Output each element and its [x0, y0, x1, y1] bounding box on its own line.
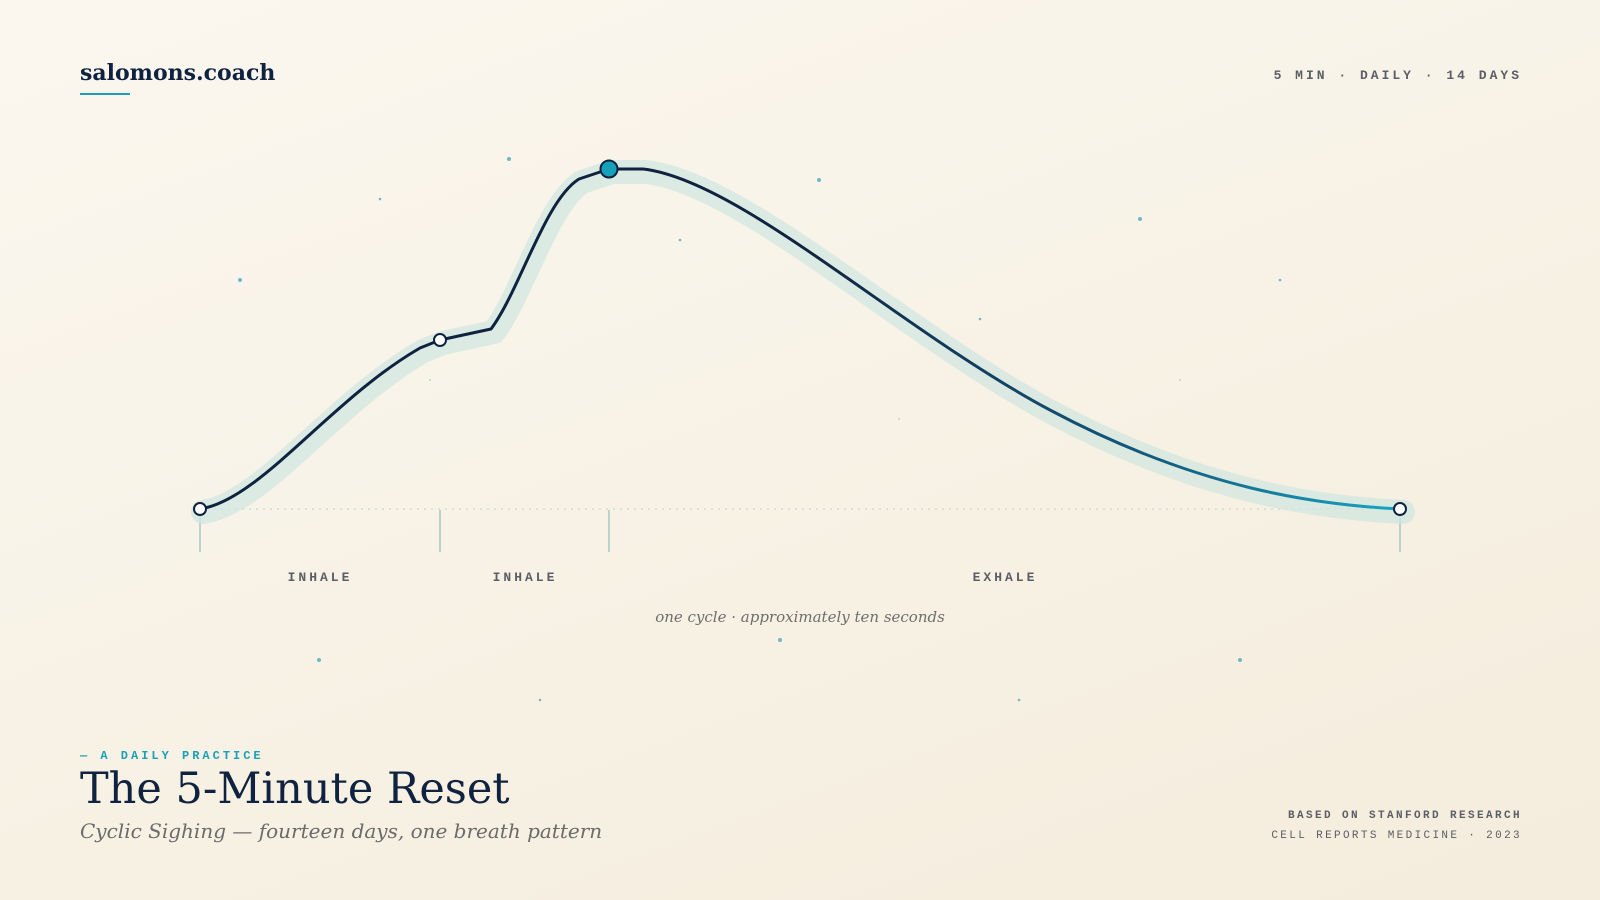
label: inhale 2: INHALE — [493, 570, 557, 585]
label: exhale: EXHALE — [973, 570, 1037, 585]
title block: The 5-Minute Reset — [80, 764, 510, 814]
scattered dots — [238, 157, 1281, 701]
title block — [80, 749, 602, 843]
label: inhale 1: INHALE — [288, 570, 352, 585]
source credit: CELL REPORTS MEDICINE · 2023 — [1271, 830, 1522, 842]
meta: duration: 5 MIN · DAILY · 14 DAYS — [1274, 68, 1522, 83]
source credit — [1271, 810, 1522, 842]
caption: one cycle · approximately ten seconds — [655, 608, 945, 626]
title block: — A DAILY PRACTICE — [80, 749, 264, 763]
source credit: BASED ON STANFORD RESEARCH — [1288, 810, 1522, 822]
title block: Cyclic Sighing — fourteen days, one breath pattern — [80, 819, 602, 843]
logo: salomons.coach — [80, 60, 275, 86]
